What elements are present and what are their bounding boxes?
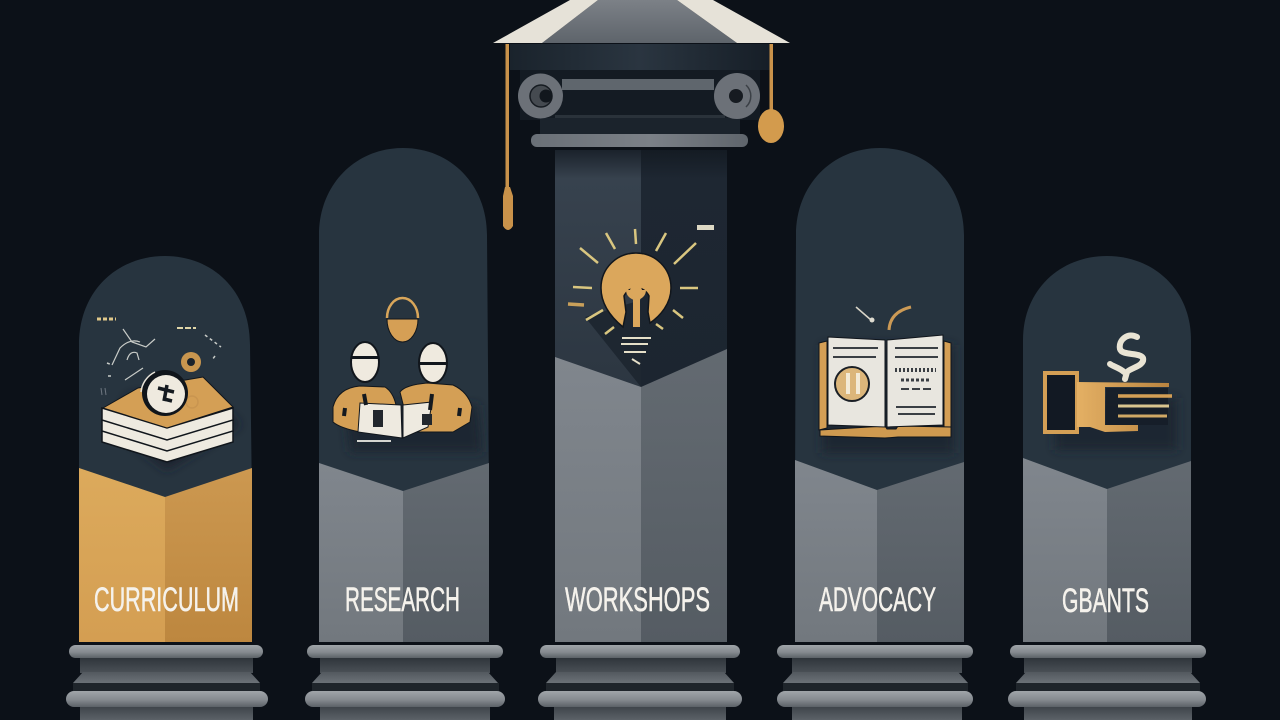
base [538,645,742,720]
gold shaft [79,468,252,642]
pillar: research [305,148,505,720]
grey shaft [319,463,489,642]
icon: open book [819,307,954,453]
label: grants: GBANTS [1062,582,1149,620]
base [777,645,973,720]
grey shaft [555,349,727,642]
pillar: workshops [493,0,790,720]
pillar: curriculum [66,256,268,720]
grey shaft [1023,458,1191,642]
icon: lightbulb with wrench [568,225,714,364]
pillar: grants [1008,256,1206,720]
pillar: advocacy [777,148,973,720]
base [1008,645,1206,720]
arch top [795,148,964,495]
label: research: RESEARCH [345,581,460,619]
icon: people reading [333,298,482,452]
base [66,645,268,720]
arch top [79,256,252,500]
mortarboard [493,0,790,43]
dark shaft [555,150,727,390]
label: advocacy: ADVOCACY [819,581,936,619]
label: workshops: WORKSHOPS [565,581,710,619]
arch top [319,148,489,495]
tassel left [503,44,513,230]
volute left [518,74,563,118]
grey shaft [795,460,964,642]
icon: hand with coin symbol [1045,335,1177,450]
icon: book stack with clock [97,319,240,470]
volute right [714,73,760,119]
base [305,645,505,720]
capital bar [531,134,748,147]
capital [510,44,770,136]
arch top [1023,256,1191,495]
label: curriculum: CURRICULUM [94,581,239,619]
tassel right [758,44,784,143]
